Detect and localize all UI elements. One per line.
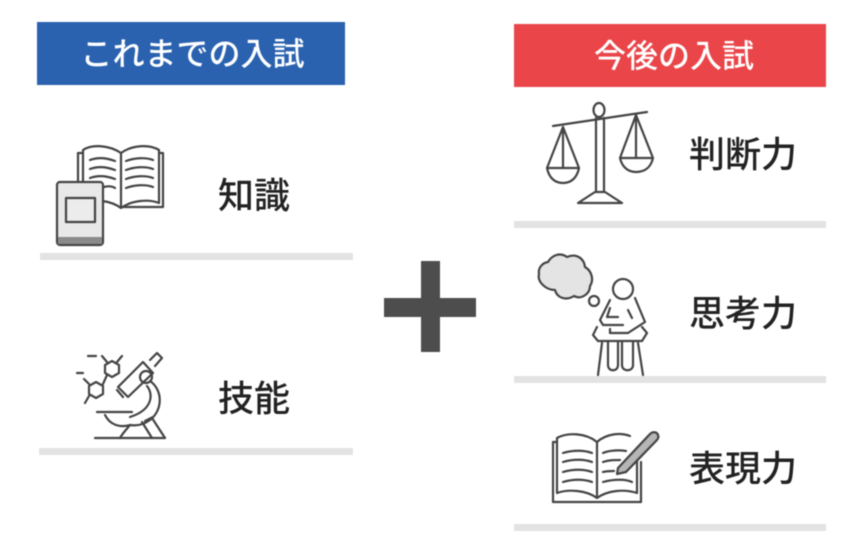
header: future exams: 今後の入試 [594, 38, 754, 74]
divider: judgment [514, 221, 826, 228]
label: thinking: 思考力 [689, 293, 797, 334]
label: knowledge: 知識 [218, 175, 290, 216]
header: future exams [514, 24, 826, 87]
plus sign [384, 261, 476, 352]
icon: balance scale [547, 103, 653, 203]
divider: knowledge [40, 253, 353, 260]
icon: books [57, 146, 163, 245]
header: current exams [37, 22, 345, 85]
divider: thinking [514, 376, 826, 383]
header: current exams: これまでの入試 [80, 36, 305, 72]
icon: person thinking [539, 255, 647, 375]
icon: book and pencil [553, 432, 658, 502]
label: expression: 表現力 [689, 448, 797, 489]
label: judgment: 判断力 [689, 134, 797, 175]
divider: skill [39, 448, 353, 455]
divider: expression [514, 524, 826, 531]
label: skill: 技能 [218, 378, 290, 419]
icon: microscope [77, 353, 165, 438]
